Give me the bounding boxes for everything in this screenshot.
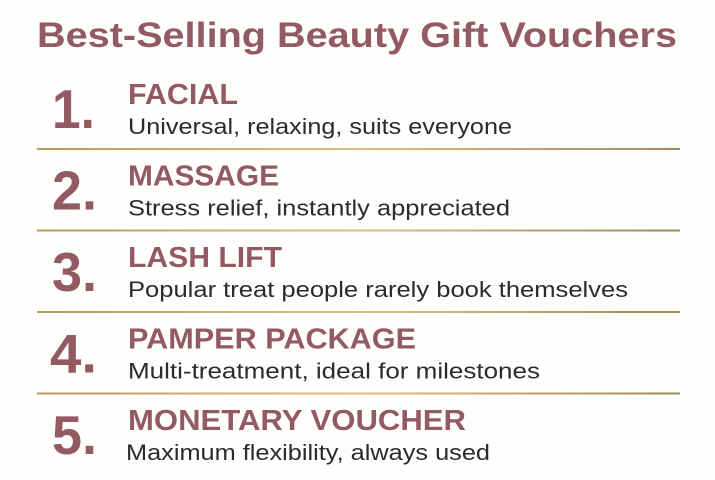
item 1: facial bbox=[52, 78, 512, 140]
item 5: monetary voucher: MONETARY VOUCHER bbox=[128, 405, 466, 437]
item 3: lash lift: Popular treat people rarely book themselves bbox=[128, 277, 628, 302]
item 2: massage: 2. bbox=[52, 160, 97, 222]
item 3: lash lift bbox=[52, 241, 628, 303]
item 1: facial: 1. bbox=[52, 78, 95, 140]
title: Best-Selling Beauty Gift Vouchers bbox=[37, 16, 677, 55]
item 4: pamper package bbox=[50, 322, 540, 384]
item 2: massage bbox=[52, 160, 510, 222]
item 5: monetary voucher: Maximum flexibility, always used bbox=[126, 440, 490, 465]
item 4: pamper package: Multi-treatment, ideal for milestones bbox=[128, 358, 540, 384]
item 5: monetary voucher: 5. bbox=[52, 404, 97, 466]
item 4: pamper package: PAMPER PACKAGE bbox=[128, 324, 416, 356]
item 5: monetary voucher bbox=[52, 404, 490, 466]
item 2: massage: Stress relief, instantly appreciated bbox=[128, 196, 510, 220]
item 3: lash lift: LASH LIFT bbox=[128, 242, 282, 274]
item 2: massage: MASSAGE bbox=[128, 160, 279, 192]
item 4: pamper package: 4. bbox=[50, 322, 97, 384]
item 1: facial: Universal, relaxing, suits everyone bbox=[128, 114, 512, 139]
item 1: facial: FACIAL bbox=[128, 79, 238, 111]
item 3: lash lift: 3. bbox=[52, 241, 97, 303]
